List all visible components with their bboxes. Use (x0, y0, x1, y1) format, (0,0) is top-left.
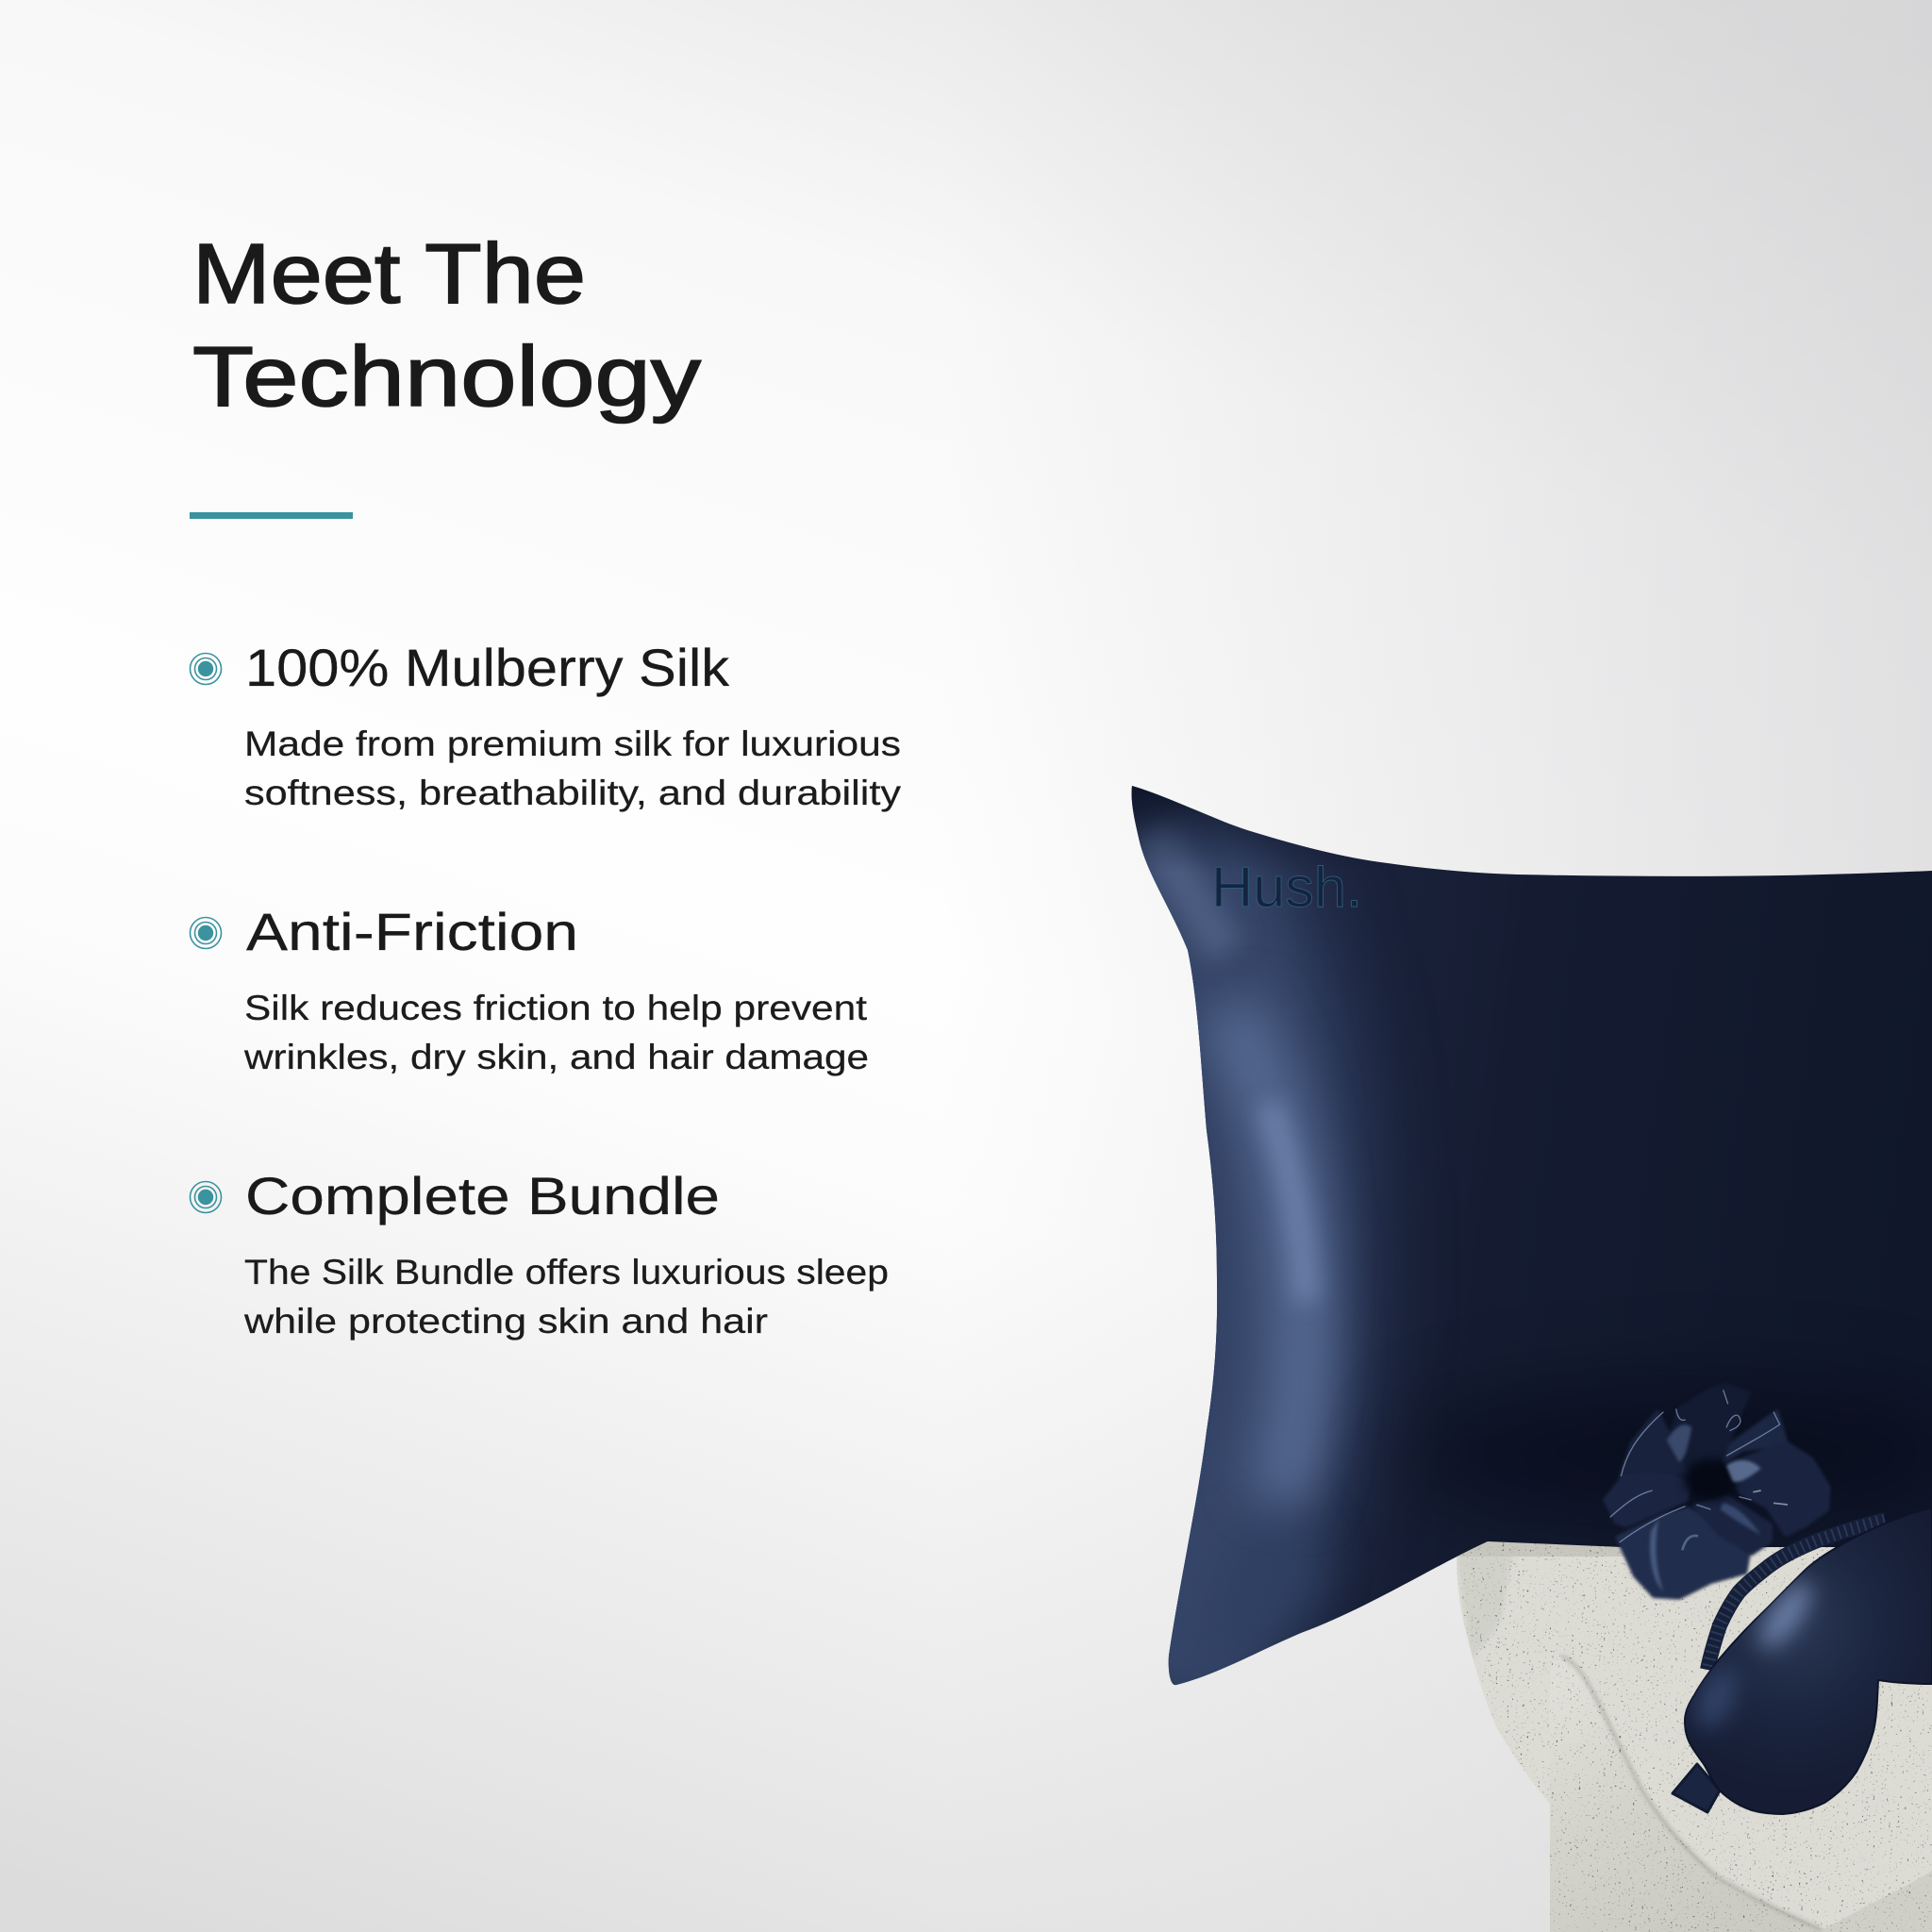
embroidered Hush logo: Hush. (1211, 856, 1362, 919)
description: 100% Mulberry Silk (244, 724, 902, 812)
title: Meet The (192, 227, 586, 322)
navy silk pillowcase (1123, 778, 1932, 1689)
silk scrunchie (1606, 1385, 1828, 1597)
heading: Complete Bundle: Complete Bundle (245, 1166, 720, 1225)
silk sheen highlights (1123, 778, 1932, 1689)
title: Technology (192, 330, 701, 425)
description: 100% Mulberry Silk: softness, breathability, and durability (244, 774, 902, 812)
icon: teal target bullet (191, 653, 221, 685)
heading: Anti-Friction: Anti-Friction (246, 902, 578, 961)
teal divider bar (190, 512, 353, 519)
description: Anti-Friction: Silk reduces friction to help prevent (244, 989, 868, 1027)
scrunchie sheen (1610, 1390, 1788, 1591)
feature: Anti-Friction (191, 902, 869, 1076)
description: Anti-Friction (243, 989, 869, 1076)
scrunchie center hole (1684, 1459, 1738, 1500)
icon: teal target bullet (191, 917, 221, 949)
feature: 100% Mulberry Silk (191, 638, 902, 812)
title (192, 227, 701, 425)
concrete pedestal (1453, 1538, 1932, 1932)
description: Complete Bundle: The Silk Bundle offers luxurious sleep (244, 1253, 889, 1291)
silk eye mask with strap (1673, 1508, 1932, 1814)
mask body (1685, 1508, 1932, 1814)
description: Anti-Friction: wrinkles, dry skin, and hair damage (243, 1038, 869, 1076)
heading: 100% Mulberry Silk: 100% Mulberry Silk (245, 638, 730, 697)
scrunchie lobes (1606, 1385, 1828, 1597)
description: Complete Bundle: while protecting skin and hair (243, 1302, 768, 1341)
feature: Complete Bundle (191, 1166, 889, 1341)
description: 100% Mulberry Silk: Made from premium silk for luxurious (244, 724, 901, 763)
description: Complete Bundle (243, 1253, 889, 1341)
icon: teal target bullet (191, 1181, 221, 1213)
mask strap (1673, 1520, 1885, 1812)
